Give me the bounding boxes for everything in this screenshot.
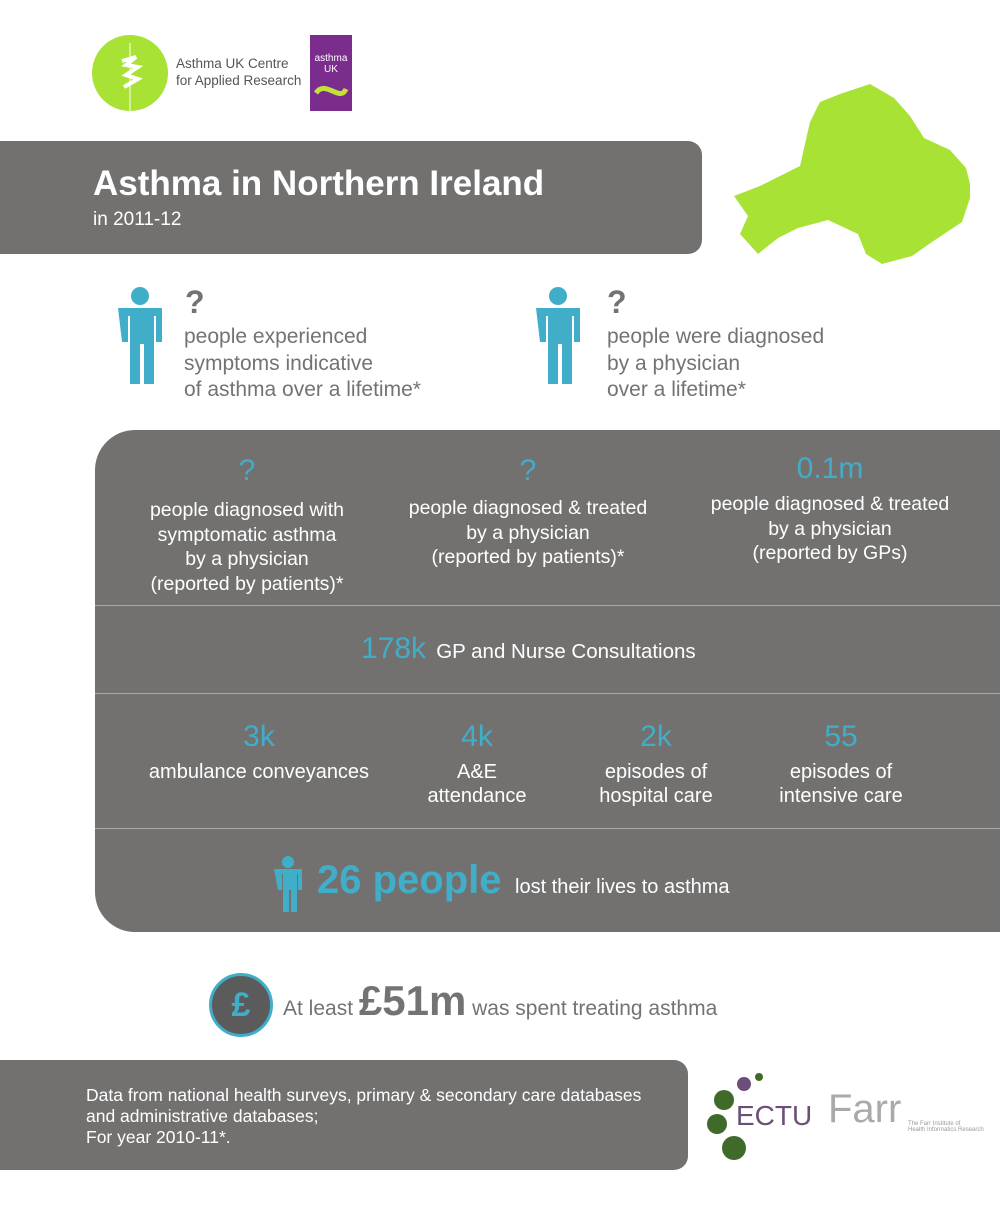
- icon: person: [274, 856, 302, 912]
- row 3: ambulance: 3k: [243, 720, 275, 753]
- row 1 col 3: people diagnosed & treated: [711, 493, 949, 515]
- stat: symptoms: ?: [185, 284, 205, 320]
- row 3: A&E: attendance: [428, 785, 526, 807]
- logo: Farr: [828, 1087, 984, 1133]
- stat: diagnosed: ?: [607, 284, 627, 320]
- logo: asthma uk centre: Asthma UK Centre: [176, 56, 289, 71]
- footer panel: and administrative databases;: [86, 1106, 318, 1126]
- row 1 col 1: ?: [239, 454, 255, 487]
- stat: symptoms: symptoms indicative: [184, 352, 373, 374]
- row 3: A&E: 4k: [461, 720, 493, 753]
- stat: diagnosed: people were diagnosed: [607, 325, 824, 348]
- map: Northern Ireland: [734, 84, 970, 264]
- footer panel: Data from national health surveys, primary & secondary care databases: [86, 1085, 641, 1105]
- stat: symptoms: [118, 284, 421, 401]
- row 3: intensive: episodes of: [790, 761, 892, 783]
- footer panel: [0, 1060, 688, 1170]
- row 3: intensive: intensive care: [779, 785, 903, 807]
- logo: Farr: Farr: [828, 1087, 901, 1131]
- logo: asthma uk centre: [92, 35, 352, 111]
- subtitle: in 2011-12: [93, 209, 181, 230]
- row 3: ambulance: [149, 720, 369, 783]
- stat: diagnosed: by a physician: [607, 352, 740, 374]
- icon: pound: [209, 973, 273, 1037]
- title: Asthma in Northern Ireland: [93, 164, 544, 203]
- row 1 col 2: ?: [520, 454, 536, 487]
- row 4: deaths: lost their lives to asthma: [515, 876, 730, 898]
- main panel: [95, 430, 1000, 932]
- stat: symptoms: people experienced: [184, 325, 367, 348]
- row 3: intensive: [779, 720, 903, 807]
- cost callout: [209, 973, 718, 1037]
- logo: asthma uk centre: asthma: [315, 53, 347, 64]
- cost callout: At least £51m was spent treating asthma: [283, 977, 717, 1024]
- row 1 col 1: by a physician: [185, 548, 309, 570]
- row 1 col 1: people diagnosed with: [150, 499, 344, 521]
- row 3: hospital: episodes of: [605, 761, 707, 783]
- row 1 col 1: (reported by patients)*: [151, 572, 343, 594]
- logo: asthma uk centre: for Applied Research: [176, 73, 301, 88]
- row 1 col 1: symptomatic asthma: [158, 524, 336, 546]
- row 3: hospital: [599, 720, 713, 807]
- row 3: A&E: [428, 720, 526, 807]
- row 4: deaths: [274, 856, 730, 912]
- row 1 col 1: [150, 454, 344, 594]
- row 3: intensive: 55: [824, 720, 858, 753]
- title panel: [0, 141, 702, 254]
- logo: Farr: The Farr Institute of: [908, 1121, 960, 1127]
- icon: pound: £: [232, 986, 250, 1024]
- row 1 col 3: (reported by GPs): [752, 542, 907, 564]
- stat: diagnosed: over a lifetime*: [607, 378, 746, 401]
- row 2: consultations: 178k GP and Nurse Consultations: [361, 632, 696, 665]
- row 3: hospital: 2k: [640, 720, 672, 753]
- row 1 col 3: 0.1m: [797, 452, 863, 485]
- logo: asthma uk centre: UK: [324, 64, 338, 75]
- row 3: A&E: A&E: [457, 761, 497, 783]
- stat: symptoms: of asthma over a lifetime*: [184, 378, 421, 401]
- row 1 col 2: (reported by patients)*: [432, 546, 624, 568]
- row 1 col 2: by a physician: [466, 522, 590, 544]
- footer panel: For year 2010-11*.: [86, 1127, 231, 1147]
- row 1 col 2: [409, 454, 647, 568]
- icon: person: [118, 287, 162, 384]
- logo: Farr: Health Informatics Research: [908, 1127, 984, 1133]
- row 3: hospital: hospital care: [599, 785, 713, 807]
- row 1 col 3: [711, 452, 949, 564]
- row 1 col 3: by a physician: [768, 518, 892, 540]
- row 4: deaths: 26 people: [317, 858, 502, 902]
- stat: diagnosed: [536, 284, 824, 401]
- logo: ECTU: [707, 1073, 812, 1160]
- logo: ECTU: ECTU: [736, 1100, 812, 1131]
- row 1 col 2: people diagnosed & treated: [409, 497, 647, 519]
- icon: person: [536, 287, 580, 384]
- row 3: ambulance: ambulance conveyances: [149, 761, 369, 783]
